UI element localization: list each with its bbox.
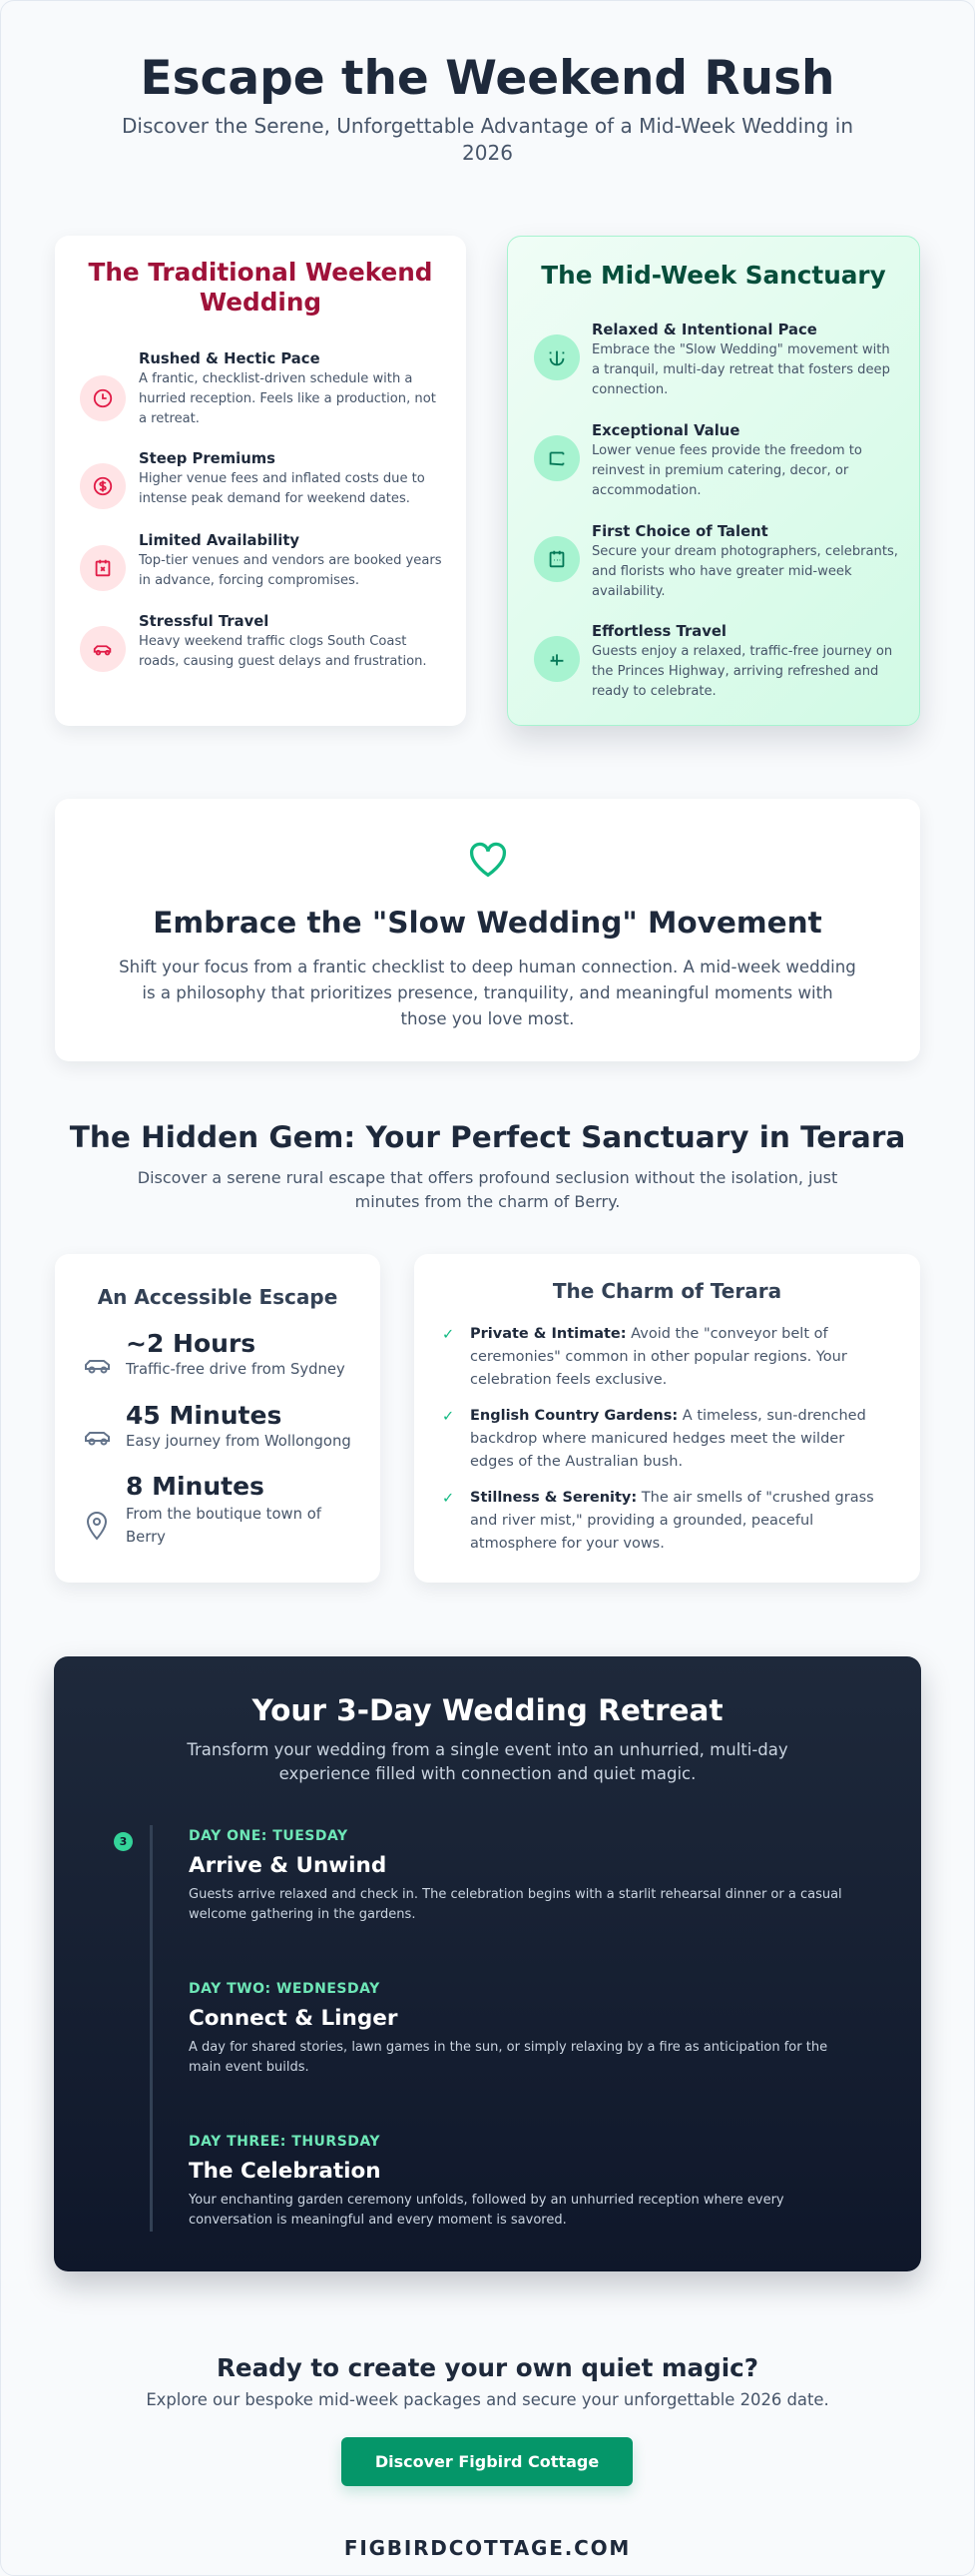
stat: 8 minutes: From the boutique town of Berry [126, 1506, 321, 1546]
icon: clock [80, 375, 126, 421]
item: stillness: Stillness & Serenity: The air smells of "crushed grass and river mist," providing a grounded, peaceful atmosphere for your vows. [470, 1490, 874, 1552]
text: hidden gem: Discover a serene rural escape that offers profound seclusion without the isolation, just minutes from the charm of Berry. [138, 1168, 837, 1211]
panel: traditional weekend: Stressful Travel [139, 613, 268, 630]
stat: 45 minutes [85, 1401, 351, 1450]
icon: pin [87, 1512, 107, 1540]
item: value [534, 422, 862, 498]
day three [189, 2134, 784, 2228]
panel: traditional weekend: Steep Premiums [139, 450, 275, 467]
panel: traditional weekend: Heavy weekend traffic clogs South Coast roads, causing guest delays and frustration. [139, 634, 427, 669]
panel: accessible escape [55, 1254, 380, 1583]
panel: traditional weekend: Top-tier venues and vendors are booked years in advance, forcing compromises. [139, 553, 442, 588]
icon: calendar x [80, 545, 126, 591]
item: private: ✓ [442, 1327, 454, 1343]
panel: traditional weekend: Higher venue fees and inflated costs due to intense peak demand for weekend dates. [139, 471, 425, 506]
badge: 3 [114, 1832, 133, 1851]
icon: plane [534, 636, 580, 682]
item: gardens: ✓ [442, 1409, 454, 1425]
text: slow wedding: Shift your focus from a frantic checklist to deep human connection. A mid-week wedding is a philosophy that prioritizes presence, tranquility, and meaningful moments with those you love most. [119, 958, 856, 1028]
icon: calendar [534, 536, 580, 582]
icon: car [85, 1432, 110, 1446]
item: talent [534, 523, 898, 599]
item: travel [80, 613, 427, 672]
item: stillness: ✓ [442, 1491, 454, 1507]
item: gardens: English Country Gardens: A timeless, sun-drenched backdrop where manicured hedges meet the wilder edges of the Australian bush. [470, 1408, 866, 1470]
heading: sanctuary: The Mid-Week Sanctuary [541, 261, 886, 290]
panel: mid-week sanctuary: Exceptional Value [592, 422, 739, 439]
icon: car [85, 1360, 110, 1374]
panel: traditional weekend: Rushed & Hectic Pace [139, 350, 320, 367]
panel: mid-week sanctuary: Guests enjoy a relaxed, traffic-free journey on the Princes Highway, arriving refreshed and ready to celebrate. [592, 644, 892, 699]
day three: DAY THREE: THURSDAY [189, 2134, 380, 2150]
list: charm [442, 1326, 874, 1552]
icon: anchor [534, 334, 580, 380]
panel: mid-week sanctuary: Secure your dream photographers, celebrants, and florists who have greater mid-week availability. [592, 544, 898, 599]
cta button: Discover Figbird Cottage [375, 2452, 599, 2471]
panel: traditional weekend: Limited Availability [139, 532, 299, 549]
cta text: Explore our bespoke mid-week packages and secure your unforgettable 2026 date. [146, 2390, 829, 2409]
panel: mid-week sanctuary: Embrace the "Slow Wedding" movement with a tranquil, multi-day retreat that fosters deep connection. [592, 342, 890, 397]
text: retreat intro: Transform your wedding from a single event into an unhurried, multi-day experience filled with connection and quiet magic. [187, 1740, 788, 1783]
stat: 2 hours: Traffic-free drive from Sydney [126, 1361, 345, 1378]
stat: 8 minutes [87, 1472, 321, 1546]
panel: mid-week sanctuary [507, 236, 920, 726]
icon: heart [469, 843, 507, 877]
day one: DAY ONE: TUESDAY [189, 1828, 348, 1844]
item: effortless travel [534, 623, 892, 699]
item: relaxed [534, 322, 890, 397]
stat: 8 minutes: 8 Minutes [126, 1472, 264, 1501]
title: Escape the Weekend Rush [140, 51, 835, 106]
day two [189, 1981, 827, 2075]
panel: slow wedding [55, 799, 920, 1061]
footer brand: FIGBIRDCOTTAGE.COM [344, 2536, 631, 2560]
panel: mid-week sanctuary: Relaxed & Intentional Pace [592, 322, 817, 338]
heading: slow wedding: Embrace the "Slow Wedding" Movement [153, 906, 822, 940]
heading: traditional: The Traditional Weekend Wedding [89, 258, 432, 317]
panel: mid-week sanctuary: Lower venue fees provide the freedom to reinvest in premium catering, decor, or accommodation. [592, 443, 862, 498]
stat: 45 minutes: Easy journey from Wollongong [126, 1433, 351, 1450]
day two: A day for shared stories, lawn games in the sun, or simply relaxing by a fire as anticipation for the main event builds. [189, 2040, 827, 2075]
badge: 3: 3 [120, 1835, 127, 1848]
item: premiums [80, 450, 425, 509]
panel: traditional weekend: A frantic, checklist-driven schedule with a hurried reception. Feels like a production, not a retreat. [139, 371, 436, 426]
heading: accessible: An Accessible Escape [98, 1285, 337, 1309]
icon: dollar [80, 463, 126, 509]
icon: value [534, 435, 580, 481]
day three: The Celebration [189, 2159, 381, 2184]
stat: 2 hours: ~2 Hours [126, 1329, 255, 1358]
day one: Guests arrive relaxed and check in. The celebration begins with a starlit rehearsal dinner or a casual welcome gathering in the gardens. [189, 1887, 842, 1922]
panel: 3-day retreat [54, 1656, 921, 2271]
stat: 45 minutes: 45 Minutes [126, 1401, 281, 1430]
heading: retreat: Your 3-Day Wedding Retreat [251, 1693, 724, 1727]
item: availability [80, 532, 442, 591]
item: rushed [80, 350, 436, 426]
panel: charm of terara [414, 1254, 920, 1583]
panel: mid-week sanctuary: First Choice of Talent [592, 523, 768, 540]
day one: Arrive & Unwind [189, 1853, 386, 1878]
day one [189, 1828, 842, 1922]
cta heading: Ready to create your own quiet magic? [217, 2353, 758, 2382]
panel: traditional weekend [55, 236, 466, 726]
heading: hidden gem: The Hidden Gem: Your Perfect Sanctuary in Terara [70, 1120, 905, 1154]
item: private: Private & Intimate: Avoid the "conveyor belt of ceremonies" common in other popular regions. Your celebration feels exclusive. [470, 1326, 847, 1388]
subtitle: Discover the Serene, Unforgettable Advantage of a Mid-Week Wedding in 2026 [122, 114, 853, 165]
stat: 2 hours [85, 1329, 345, 1378]
day two: DAY TWO: WEDNESDAY [189, 1981, 380, 1997]
timeline line [150, 1825, 153, 2232]
panel: mid-week sanctuary: Effortless Travel [592, 623, 727, 640]
heading: charm: The Charm of Terara [553, 1279, 781, 1303]
day two: Connect & Linger [189, 2006, 397, 2031]
icon: car [80, 626, 126, 672]
day three: Your enchanting garden ceremony unfolds, followed by an unhurried reception where every conversation is meaningful and every moment is savored. [189, 2193, 784, 2228]
cta button [341, 2437, 633, 2486]
